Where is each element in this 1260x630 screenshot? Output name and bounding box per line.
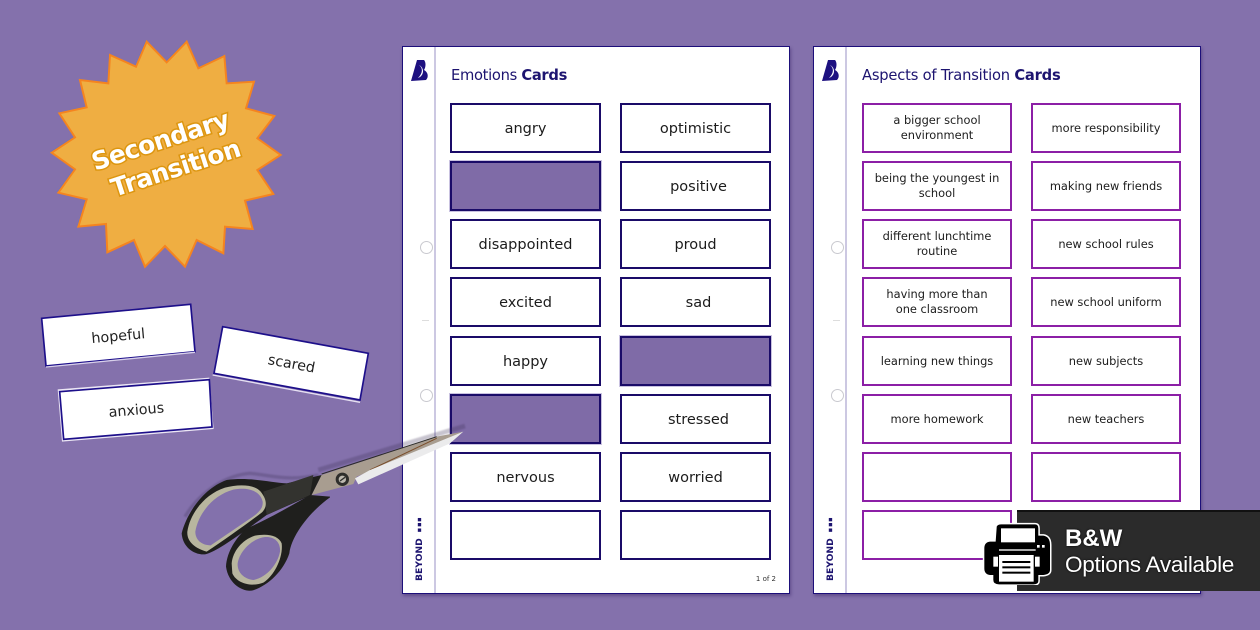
card: stressed bbox=[620, 394, 771, 444]
card: making new friends bbox=[1050, 178, 1162, 192]
cut-out card: hopeful bbox=[40, 303, 196, 368]
card: disappointed: disappointed bbox=[478, 236, 572, 252]
card: angry: angry bbox=[505, 120, 546, 136]
card: worried: worried bbox=[668, 470, 723, 486]
card bbox=[862, 103, 1012, 153]
banner text bbox=[1065, 525, 1234, 577]
card: new subjects bbox=[1069, 354, 1143, 368]
card bbox=[1031, 103, 1181, 153]
starburst badge: Secondary Transition bbox=[50, 40, 282, 268]
card bbox=[862, 219, 1012, 269]
heading: Emotions Cards bbox=[451, 67, 567, 84]
card: new teachers bbox=[1068, 412, 1144, 426]
banner text: B&W bbox=[1065, 525, 1122, 552]
banner: B&W options available bbox=[1017, 510, 1260, 591]
card: environment bbox=[901, 128, 973, 142]
card bbox=[1031, 336, 1181, 386]
card: empty bbox=[1031, 510, 1181, 560]
icon: printer bbox=[982, 522, 1052, 585]
card: disappointed bbox=[450, 219, 601, 269]
card: excited: excited bbox=[499, 294, 552, 310]
card: positive: positive bbox=[670, 178, 727, 194]
card: empty bbox=[620, 510, 771, 560]
cut-out card: scared bbox=[212, 326, 370, 403]
badge text: Transition bbox=[107, 134, 244, 203]
worksheet: Aspects of Transition Cards bbox=[813, 46, 1201, 594]
card: one classroom bbox=[896, 302, 978, 316]
card: nervous bbox=[450, 452, 601, 502]
card bbox=[862, 336, 1012, 386]
logo bbox=[411, 60, 428, 81]
card: optimistic: optimistic bbox=[660, 120, 731, 136]
card: empty bbox=[1031, 452, 1181, 502]
card: empty bbox=[862, 510, 1012, 560]
card: school bbox=[919, 186, 955, 200]
card: new school uniform bbox=[1050, 294, 1162, 308]
card: worried bbox=[620, 452, 771, 502]
cut-out card: scared: scared bbox=[267, 352, 316, 377]
card: sad: sad bbox=[686, 294, 711, 310]
card: excited bbox=[450, 277, 601, 327]
card: learning new things bbox=[881, 354, 993, 368]
card: stressed: stressed bbox=[668, 412, 729, 428]
worksheet: Emotions Cards bbox=[402, 46, 790, 594]
cut-out card: hopeful: hopeful bbox=[91, 326, 146, 347]
side brand bbox=[414, 516, 425, 581]
card: angry bbox=[450, 103, 601, 153]
side brand bbox=[825, 516, 836, 581]
heading: Aspects of Transition Cards bbox=[862, 67, 1061, 84]
card: blank purple bbox=[450, 394, 601, 444]
card: empty bbox=[450, 510, 601, 560]
page number: 1 of 2 bbox=[756, 575, 776, 583]
card: proud bbox=[620, 219, 771, 269]
card: different lunchtime bbox=[883, 229, 991, 243]
card bbox=[862, 161, 1012, 211]
side brand: ■■■ bbox=[828, 516, 833, 532]
card: more homework bbox=[890, 412, 983, 426]
card bbox=[862, 394, 1012, 444]
card: more responsibility bbox=[1052, 120, 1160, 134]
card: being the youngest in bbox=[875, 171, 999, 185]
card bbox=[862, 277, 1012, 327]
cut-out card: anxious bbox=[58, 378, 214, 442]
card: new school rules bbox=[1058, 236, 1154, 250]
logo bbox=[822, 60, 839, 81]
side brand: BEYOND bbox=[825, 538, 836, 581]
side brand: ■■■ bbox=[417, 516, 422, 532]
card bbox=[1031, 161, 1181, 211]
card: empty bbox=[862, 452, 1012, 502]
card: nervous: nervous bbox=[496, 470, 555, 486]
card bbox=[1031, 277, 1181, 327]
card: optimistic bbox=[620, 103, 771, 153]
card: happy: happy bbox=[503, 354, 548, 370]
badge text bbox=[88, 104, 244, 206]
card: proud: proud bbox=[674, 236, 717, 252]
card: having more than bbox=[886, 287, 988, 301]
badge text: Secondary bbox=[88, 105, 233, 176]
side brand: BEYOND bbox=[414, 538, 425, 581]
card: routine bbox=[917, 244, 957, 258]
card bbox=[1031, 394, 1181, 444]
card: sad bbox=[620, 277, 771, 327]
cut-out card: anxious: anxious bbox=[108, 400, 165, 421]
card: blank purple bbox=[450, 161, 601, 211]
card: blank purple bbox=[620, 336, 771, 386]
card: a bigger school bbox=[893, 113, 981, 127]
banner text: Options Available bbox=[1065, 552, 1234, 577]
card: positive bbox=[620, 161, 771, 211]
icon: scissors bbox=[182, 424, 466, 591]
card: happy bbox=[450, 336, 601, 386]
card bbox=[1031, 219, 1181, 269]
